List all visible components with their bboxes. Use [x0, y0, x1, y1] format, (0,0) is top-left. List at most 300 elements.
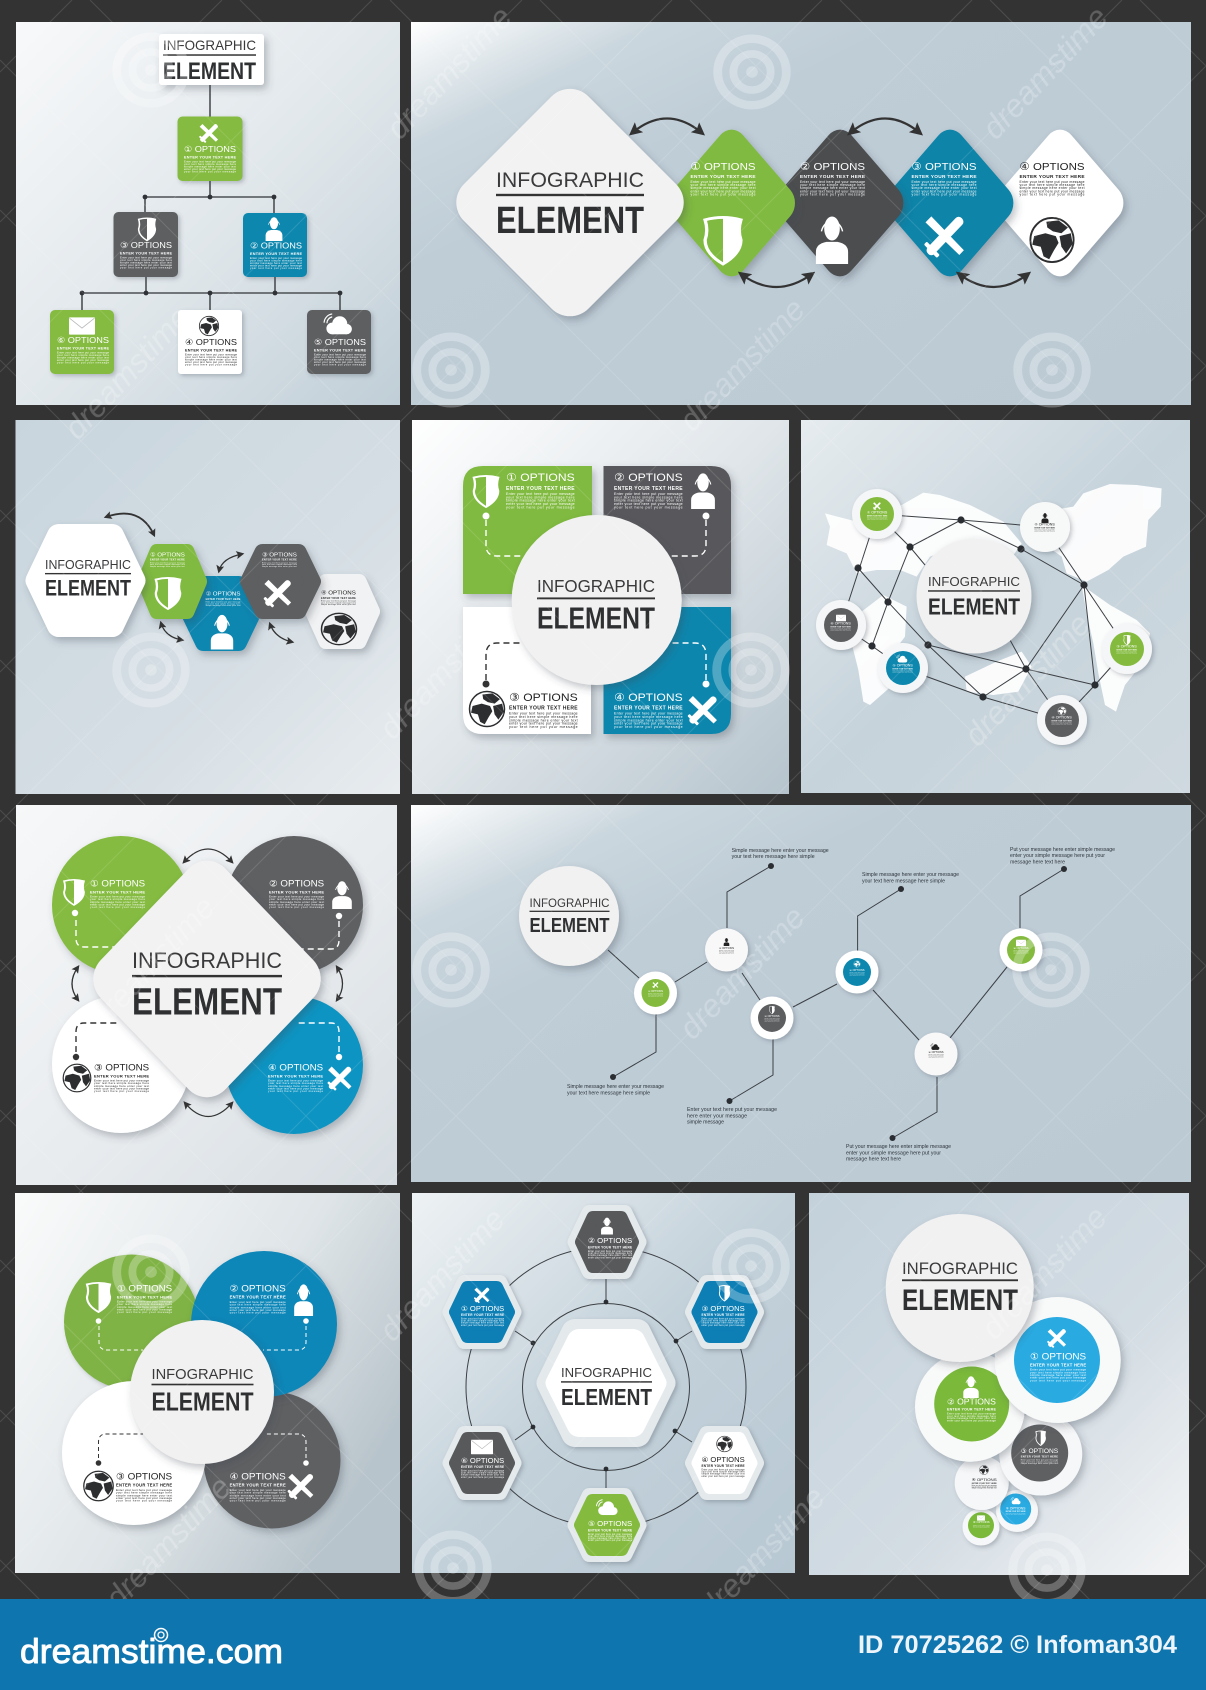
callout texts: Put your message here enter simple message: [1010, 847, 1115, 853]
node 3 grey: [750, 996, 794, 1040]
node 3 grey: your text here simple message here: [764, 1019, 780, 1022]
option 5 box: simple message here enter your text: [314, 358, 366, 362]
green diamond option 1: your text here simple message here: [690, 183, 756, 187]
node 2 white: simple message here enter your text: [719, 952, 735, 955]
watermark spirals and wordmarks: dreamstime: [372, 599, 512, 746]
node 1 green: Enter your text here put your message: [867, 516, 888, 519]
option 6 box: Enter your text here put your message: [57, 350, 110, 354]
white hexagon option 4: ④ OPTIONS: [321, 590, 356, 597]
grey square option 2: enter your text here put your message: [614, 502, 683, 506]
watermark spirals and wordmarks: dreamstime: [957, 606, 1097, 753]
hex option 4: Enter your text here put your message: [702, 1469, 745, 1472]
hex option 5: ENTER YOUR TEXT HERE: [588, 1528, 633, 1532]
grey diamond option 2: ② OPTIONS: [800, 161, 865, 173]
blue circle option 4: Enter your text here put your message: [268, 1079, 324, 1083]
grey circle option 2: enter your text here put your message: [269, 902, 325, 906]
node 1 green: simple message here enter your text: [867, 518, 888, 521]
hex option 6: ENTER YOUR TEXT HERE: [461, 1465, 504, 1469]
node 2 white: ENTER YOUR TEXT HERE: [1034, 527, 1055, 529]
title circle: INFOGRAPHIC: [152, 1367, 254, 1383]
title circle: ELEMENT: [902, 1284, 1018, 1317]
green diamond option 1: ENTER YOUR TEXT HERE: [690, 174, 756, 180]
white diamond option 4: ④ OPTIONS: [1020, 161, 1084, 173]
option 3 box: ENTER YOUR TEXT HERE: [120, 252, 172, 256]
option 6 box: ⑥ OPTIONS: [57, 335, 109, 345]
node 3 green: Enter your text here put your message: [1116, 650, 1137, 653]
hex option 3: ENTER YOUR TEXT HERE: [702, 1313, 745, 1317]
callout texts: simple message: [687, 1120, 724, 1126]
option 3 box: [114, 212, 178, 277]
grey hexagon option 3: Enter your text here put your message: [262, 561, 297, 564]
node 5 white: your text here simple message here: [928, 1055, 944, 1058]
green hexagon option 1: simple message here enter your text: [150, 565, 185, 568]
green circle option 1: ENTER YOUR TEXT HERE: [117, 1294, 172, 1299]
panel 4: four rounded squares around a circle: [412, 420, 789, 794]
hex option 3: Enter your text here put your message: [702, 1318, 745, 1321]
grey circle option 4: enter your text here put your message: [230, 1496, 286, 1500]
green bubble option 2: Enter your text here put your message: [947, 1412, 996, 1415]
blue diamond option 3: [880, 122, 1020, 284]
green square option 1: your text here put your message: [506, 505, 575, 509]
green bubble option 2: ENTER YOUR TEXT HERE: [947, 1408, 996, 1412]
blue bubble option 1: Enter your text here put your message: [1030, 1368, 1087, 1372]
white square option 3: ENTER YOUR TEXT HERE: [509, 705, 578, 711]
node 3 grey: simple message here enter your text: [764, 1020, 780, 1023]
option 5 box: enter your text here put your message: [314, 360, 366, 364]
blue circle option 2: ENTER YOUR TEXT HERE: [230, 1295, 286, 1300]
option 1 box: ENTER YOUR TEXT HERE: [184, 156, 236, 160]
option 4 box: your text here put your message: [185, 362, 238, 366]
green hexagon option 1: your text here simple message here: [150, 563, 185, 566]
blue circle option 4: simple message here enter your text: [268, 1084, 323, 1088]
blue bubble option 1: your text here put your message: [1030, 1378, 1087, 1382]
green square option 1: [463, 466, 592, 594]
green circle option 1: your text here put your message: [117, 1310, 173, 1314]
node 3 grey: Enter your text here put your message: [764, 1018, 780, 1021]
option 3 box: your text here put your message: [120, 266, 173, 270]
node 4 grey: simple message here enter your text: [1052, 723, 1072, 726]
callout texts: message here text here: [1010, 860, 1065, 866]
grey square option 2: your text here simple message here: [614, 495, 683, 499]
grey circle option 4: ENTER YOUR TEXT HERE: [230, 1483, 286, 1488]
grey square option 2: Enter your text here put your message: [614, 492, 683, 496]
node 6 green: your text here simple message here: [1014, 951, 1029, 954]
grey bubble option 3: ENTER YOUR TEXT HERE: [1021, 1455, 1058, 1459]
grey circle option 2: ② OPTIONS: [269, 878, 324, 888]
white circle option 3: your text here put your message: [116, 1499, 173, 1503]
curved double arrows: [632, 118, 1028, 287]
white diamond option 4: enter your text here put your message: [1020, 189, 1085, 193]
hex option 2 top: [575, 1212, 639, 1272]
blue bubble option 1: simple message here enter your text: [1030, 1373, 1086, 1377]
watermark spirals and wordmarks: dreamstime: [379, 0, 519, 146]
footer banner: [0, 1599, 1206, 1690]
title circle: INFOGRAPHIC: [902, 1259, 1018, 1278]
blue circle option 2: your text here simple message here: [230, 1303, 286, 1307]
central title hexagon: ELEMENT: [561, 1384, 652, 1410]
node 5 blue: simple message here enter your text: [892, 671, 913, 674]
node 1 green: [852, 489, 902, 539]
hex option 2 top: your text here simple message here: [588, 1252, 633, 1255]
hex option 6: [450, 1433, 514, 1493]
blue diamond option 3: ENTER YOUR TEXT HERE: [912, 174, 976, 180]
option 1 box: Enter your text here put your message: [184, 160, 236, 164]
grey hexagon option 3: simple message here enter your text: [262, 565, 297, 568]
grey diamond option 2: your text here simple message here: [800, 183, 865, 187]
option 5 box: Enter your text here put your message: [314, 352, 366, 356]
blue hexagon option 2: simple message here enter your text: [206, 604, 241, 607]
node 5 blue: ⑤ OPTIONS: [892, 664, 914, 668]
image id and author: ID 70725262 © Infoman304: [858, 1631, 1177, 1659]
white circle option 3: your text here simple message here: [116, 1491, 173, 1495]
blue bubble option 1: [995, 1297, 1121, 1423]
network lines: [841, 514, 1127, 720]
grey circle option 2: ENTER YOUR TEXT HERE: [269, 889, 324, 894]
title circle: [512, 515, 682, 685]
blue circle option 4: enter your text here put your message: [268, 1086, 324, 1090]
hex option 4: ④ OPTIONS: [702, 1456, 745, 1464]
green circle option 1: ENTER YOUR TEXT HERE: [90, 889, 145, 894]
hex option 3: your text here simple message here: [702, 1320, 745, 1323]
green circle option 1: [52, 836, 190, 974]
node 4 blue: your text here simple message here: [850, 973, 865, 976]
callout texts: enter your simple message here put your: [846, 1150, 941, 1156]
option 3 box: your text here simple message here: [120, 258, 172, 262]
green circle option 1: Enter your text here put your message: [90, 895, 146, 899]
hex option 2 top: ② OPTIONS: [588, 1237, 632, 1245]
green circle option 1: ① OPTIONS: [117, 1283, 172, 1293]
grey square option 2: your text here put your message: [614, 505, 683, 509]
watermark spirals and wordmarks: dreamstime: [82, 889, 222, 1036]
big title diamond: ELEMENT: [496, 199, 644, 241]
option 2 box: ENTER YOUR TEXT HERE: [250, 252, 302, 256]
curved arrows: [72, 849, 342, 1116]
blue circle option 2: enter your text here put your message: [230, 1308, 286, 1312]
option 4 box: [178, 310, 242, 374]
callout texts: Put your message here enter simple message: [846, 1144, 951, 1150]
hex option 2 top: Enter your text here put your message: [588, 1250, 633, 1253]
node 4 blue: Enter your text here put your message: [850, 972, 865, 975]
hex option 5: your text here simple message here: [588, 1535, 633, 1538]
node 3 grey: ENTER YOUR TEXT HERE: [764, 1018, 780, 1020]
hex option 6: enter your text here put your message: [461, 1476, 505, 1479]
white circle option 3: enter your text here put your message: [94, 1086, 150, 1090]
watermark spirals and wordmarks: dreamstime: [672, 291, 812, 438]
grey bubble option 3: [999, 1412, 1082, 1496]
green circle option 1: Enter your text here put your message: [117, 1300, 173, 1304]
option 6 box: [50, 310, 114, 374]
blue diamond option 3: Enter your text here put your message: [912, 180, 977, 184]
white circle option 3: ③ OPTIONS: [116, 1472, 172, 1482]
node 6 green: [1000, 928, 1042, 972]
option 5 box: your text here simple message here: [314, 355, 366, 359]
title circle: [916, 538, 1032, 654]
grey circle option 2: your text here simple message here: [269, 897, 325, 901]
node 6 grey: [816, 600, 866, 650]
watermark spirals and wordmarks: dreamstime: [372, 1201, 512, 1348]
grey square option 2: ENTER YOUR TEXT HERE: [614, 486, 683, 492]
white square option 3: your text here put your message: [509, 725, 578, 729]
node 6 green: ⑥ OPTIONS: [1014, 947, 1029, 950]
grey diamond option 2: simple message here enter your text: [800, 186, 865, 190]
central title hexagon: [550, 1332, 662, 1434]
hex option 5: Enter your text here put your message: [588, 1533, 633, 1536]
white circle option 3: [52, 995, 190, 1133]
option 5 box: your text here put your message: [314, 362, 367, 366]
blue bubble option 1: ENTER YOUR TEXT HERE: [1030, 1362, 1086, 1367]
white circle option 3: enter your text here put your message: [116, 1496, 173, 1500]
callout texts: here enter your message: [687, 1114, 747, 1120]
central title hexagon: INFOGRAPHIC: [561, 1365, 652, 1380]
watermark spirals and wordmarks: dreamstime: [975, 0, 1115, 146]
white diamond option 4: your text here put your message: [1020, 192, 1085, 196]
hex option 1: Enter your text here put your message: [461, 1318, 505, 1321]
grey circle option 2: Enter your text here put your message: [269, 895, 325, 899]
green diamond option 1: ① OPTIONS: [690, 161, 756, 173]
node 2 white: [705, 928, 748, 972]
callout texts: your text here message here simple: [732, 854, 815, 860]
option 4 box: ENTER YOUR TEXT HERE: [185, 348, 237, 352]
blue square option 4: enter your text here put your message: [614, 722, 683, 726]
title circle: ELEMENT: [530, 915, 610, 937]
white bubble option 4: ④ OPTIONS: [972, 1477, 997, 1482]
white circle option 3: simple message here enter your text: [116, 1493, 172, 1497]
node 4 grey: [1037, 695, 1087, 745]
green diamond option 1: Enter your text here put your message: [690, 180, 756, 184]
white diamond option 4: your text here simple message here: [1020, 183, 1085, 187]
rings and spokes: [466, 1247, 746, 1527]
blue diamond option 3: enter your text here put your message: [912, 189, 977, 193]
callout texts: Simple message here enter your message: [862, 872, 959, 878]
node 2 white: ② OPTIONS: [1034, 523, 1056, 527]
blue circle option 4: your text here simple message here: [268, 1081, 324, 1085]
title diamond: [83, 850, 331, 1108]
option 1 box: your text here put your message: [184, 170, 237, 174]
green bubble option 2: [915, 1352, 1025, 1462]
big title diamond: INFOGRAPHIC: [496, 168, 644, 192]
hex option 1: enter your text here put your message: [461, 1324, 505, 1327]
big title hexagon: INFOGRAPHIC: [45, 558, 131, 572]
watermark spirals and wordmarks: dreamstime: [672, 899, 812, 1046]
green hexagon option 1: ENTER YOUR TEXT HERE: [150, 559, 185, 562]
node 5 blue: Enter your text here put your message: [892, 669, 913, 672]
node 1 green: [634, 972, 677, 1014]
option 2 box: ② OPTIONS: [250, 240, 302, 250]
blue bubble option 1: ① OPTIONS: [1030, 1351, 1086, 1361]
small blue bubble option 5: ENTER YOUR TEXT HERE: [1006, 1511, 1025, 1513]
green circle option 1: simple message here enter your text: [117, 1305, 172, 1309]
green bubble option 2: simple message here enter your text: [947, 1417, 996, 1420]
white hexagon option 4: [312, 582, 372, 645]
node 6 green: simple message here enter your text: [1014, 952, 1029, 955]
option 2 box: simple message here enter your text: [250, 261, 302, 265]
option 5 box: ENTER YOUR TEXT HERE: [314, 348, 366, 352]
small blue bubble option 5: [996, 1490, 1038, 1532]
white circle option 3: ENTER YOUR TEXT HERE: [94, 1073, 149, 1078]
green hexagon option 1: ① OPTIONS: [150, 551, 185, 558]
panel 1: organisation chart: [16, 22, 400, 405]
small green bubble option 6: [962, 1508, 1000, 1546]
green circle option 1: simple message here enter your text: [90, 900, 145, 904]
green square option 1: simple message here enter your text: [506, 499, 575, 503]
green bubble option 2: enter your text here put your message: [947, 1420, 996, 1423]
title card: [159, 34, 264, 85]
node 4 grey: your text here simple message here: [1052, 722, 1072, 725]
blue circle option 2: simple message here enter your text: [230, 1305, 286, 1309]
node 1 green: ① OPTIONS: [867, 511, 888, 515]
node 4 grey: ④ OPTIONS: [1052, 716, 1073, 720]
hex option 1: your text here simple message here: [461, 1320, 505, 1323]
grey circle option 4: ④ OPTIONS: [230, 1472, 286, 1482]
grey hexagon option 3: ENTER YOUR TEXT HERE: [262, 559, 297, 562]
world map: [825, 484, 1162, 712]
hex option 5: simple message here enter your text: [588, 1537, 633, 1540]
green square option 1: ENTER YOUR TEXT HERE: [506, 486, 575, 492]
node 3 grey: ③ OPTIONS: [764, 1015, 780, 1018]
curved arrows: [106, 514, 292, 642]
grey diamond option 2: your text here put your message: [800, 192, 865, 196]
option 6 box: ENTER YOUR TEXT HERE: [57, 346, 109, 350]
node 6 green: ENTER YOUR TEXT HERE: [1014, 950, 1029, 952]
blue diamond option 3: ③ OPTIONS: [912, 161, 976, 173]
hex option 4: simple message here enter your text: [702, 1473, 745, 1476]
option 2 box: your text here put your message: [250, 266, 303, 270]
node 2 white: simple message here enter your text: [1034, 530, 1055, 533]
option 3 box: enter your text here put your message: [120, 263, 172, 267]
node 5 white: simple message here enter your text: [928, 1056, 944, 1059]
title circle: [130, 1320, 274, 1464]
white diamond option 4: ENTER YOUR TEXT HERE: [1020, 174, 1084, 180]
green square option 1: enter your text here put your message: [506, 502, 575, 506]
hex option 4: ENTER YOUR TEXT HERE: [702, 1464, 745, 1468]
grey diamond option 2: ENTER YOUR TEXT HERE: [800, 174, 865, 180]
white circle option 3: ③ OPTIONS: [94, 1062, 149, 1072]
grey hexagon option 3: ③ OPTIONS: [262, 551, 297, 558]
small blue bubble option 5: Enter your text here put your message: [1006, 1512, 1026, 1515]
blue square option 4: simple message here enter your text: [614, 718, 683, 722]
node 5 white: Enter your text here put your message: [928, 1054, 944, 1057]
grey circle option 4: simple message here enter your text: [230, 1493, 286, 1497]
node 4 grey: ENTER YOUR TEXT HERE: [1052, 720, 1072, 722]
option 4 box: enter your text here put your message: [185, 360, 238, 364]
grey circle option 4: your text here put your message: [230, 1499, 286, 1503]
node 4 grey: Enter your text here put your message: [1052, 721, 1072, 724]
option 6 box: simple message here enter your text: [57, 356, 109, 360]
white square option 3: enter your text here put your message: [509, 722, 578, 726]
grey square option 2: [604, 466, 731, 594]
callout texts: message here text here: [846, 1156, 901, 1162]
grey circle option 2: [225, 836, 363, 974]
grey diamond option 2: [770, 122, 910, 284]
blue circle option 2: ② OPTIONS: [230, 1284, 286, 1294]
green diamond option 1: your text here put your message: [690, 192, 756, 196]
network dots: [854, 516, 1099, 701]
option 1 box: ① OPTIONS: [184, 144, 236, 154]
blue diamond option 3: simple message here enter your text: [912, 186, 977, 190]
white bubble option 4: your text here simple message here: [972, 1485, 997, 1488]
hex option 6: simple message here enter your text: [461, 1474, 505, 1477]
white square option 3: Enter your text here put your message: [509, 712, 578, 716]
hex option 5: enter your text here put your message: [588, 1539, 633, 1542]
white bubble option 4: Enter your text here put your message: [972, 1484, 997, 1487]
hex option 1: [450, 1282, 514, 1342]
node 6 grey: Enter your text here put your message: [830, 627, 851, 630]
white hexagon option 4: simple message here enter your text: [321, 603, 356, 606]
node 1 green: Enter your text here put your message: [648, 993, 664, 996]
option 4 box: simple message here enter your text: [185, 358, 237, 362]
callout texts: your text here message here simple: [567, 1090, 650, 1096]
hex option 6: your text here simple message here: [461, 1472, 505, 1475]
blue circle option 4: ④ OPTIONS: [268, 1062, 323, 1072]
title diamond: INFOGRAPHIC: [132, 948, 282, 973]
node 3 green: your text here simple message here: [1116, 651, 1137, 654]
blue bubble option 1: enter your text here put your message: [1030, 1376, 1087, 1380]
grey circle option 2: simple message here enter your text: [269, 900, 324, 904]
hex option 4: enter your text here put your message: [702, 1475, 745, 1478]
panel 9: hexagon ring: [412, 1193, 795, 1573]
option 1 box: simple message here enter your text: [184, 164, 236, 168]
blue hexagon option 2: Enter your text here put your message: [206, 601, 240, 604]
blue square option 4: Enter your text here put your message: [614, 712, 683, 716]
node 6 grey: your text here simple message here: [830, 628, 851, 631]
node 2 white: your text here simple message here: [719, 951, 735, 954]
hex option 4: your text here simple message here: [702, 1471, 745, 1474]
node 1 green: ENTER YOUR TEXT HERE: [867, 515, 887, 517]
node 2 white: Enter your text here put your message: [719, 950, 735, 953]
title circle: INFOGRAPHIC: [537, 577, 655, 596]
node 2 white: [1020, 502, 1070, 552]
option 6 box: your text here put your message: [57, 360, 110, 364]
small green bubble option 6: ⑥ OPTIONS: [973, 1520, 990, 1524]
option 6 box: enter your text here put your message: [57, 358, 110, 362]
white circle option 3: ENTER YOUR TEXT HERE: [116, 1483, 172, 1488]
node 2 white: ② OPTIONS: [719, 947, 734, 950]
hex option 3: enter your text here put your message: [702, 1324, 745, 1327]
hex option 5: ⑤ OPTIONS: [588, 1520, 632, 1528]
blue hexagon option 2: your text here simple message here: [206, 602, 240, 605]
node 2 white: your text here simple message here: [1034, 529, 1055, 532]
white circle option 3: your text here put your message: [94, 1089, 150, 1093]
panel 6: four circles behind a diamond: [16, 805, 397, 1185]
big title hexagon: ELEMENT: [45, 576, 131, 601]
green hexagon option 1: [144, 551, 200, 612]
panel 8: four overlapping circles: [15, 1193, 400, 1573]
white circle option 3: Enter your text here put your message: [94, 1079, 150, 1083]
option 4 box: ④ OPTIONS: [185, 337, 237, 347]
node 3 green: simple message here enter your text: [1116, 652, 1137, 655]
blue diamond option 3: your text here put your message: [912, 192, 977, 196]
blue square option 4: your text here simple message here: [614, 715, 683, 719]
green bubble option 2: ② OPTIONS: [947, 1398, 996, 1407]
small green bubble option 6: your text here simple message here: [973, 1525, 990, 1528]
option 5 box: ⑤ OPTIONS: [314, 337, 366, 347]
node 2 white: ENTER YOUR TEXT HERE: [719, 950, 734, 952]
callout texts: your text here message here simple: [862, 878, 945, 884]
option 3 box: simple message here enter your text: [120, 260, 172, 264]
white circle option 3: Enter your text here put your message: [116, 1488, 173, 1492]
hex option 2 top: simple message here enter your text: [588, 1254, 633, 1257]
node 6 green: Enter your text here put your message: [1014, 950, 1029, 953]
hex option 5: [575, 1495, 639, 1555]
node 1 green: your text here simple message here: [867, 517, 888, 520]
grey square option 2: ② OPTIONS: [614, 472, 683, 484]
white hexagon option 4: ENTER YOUR TEXT HERE: [321, 597, 356, 600]
blue square option 4: [604, 607, 731, 735]
white diamond option 4: [990, 122, 1130, 284]
panel 10: bubble cluster: [809, 1193, 1189, 1575]
hex option 6: ⑥ OPTIONS: [461, 1457, 505, 1465]
blue hexagon option 2: ② OPTIONS: [206, 591, 241, 598]
